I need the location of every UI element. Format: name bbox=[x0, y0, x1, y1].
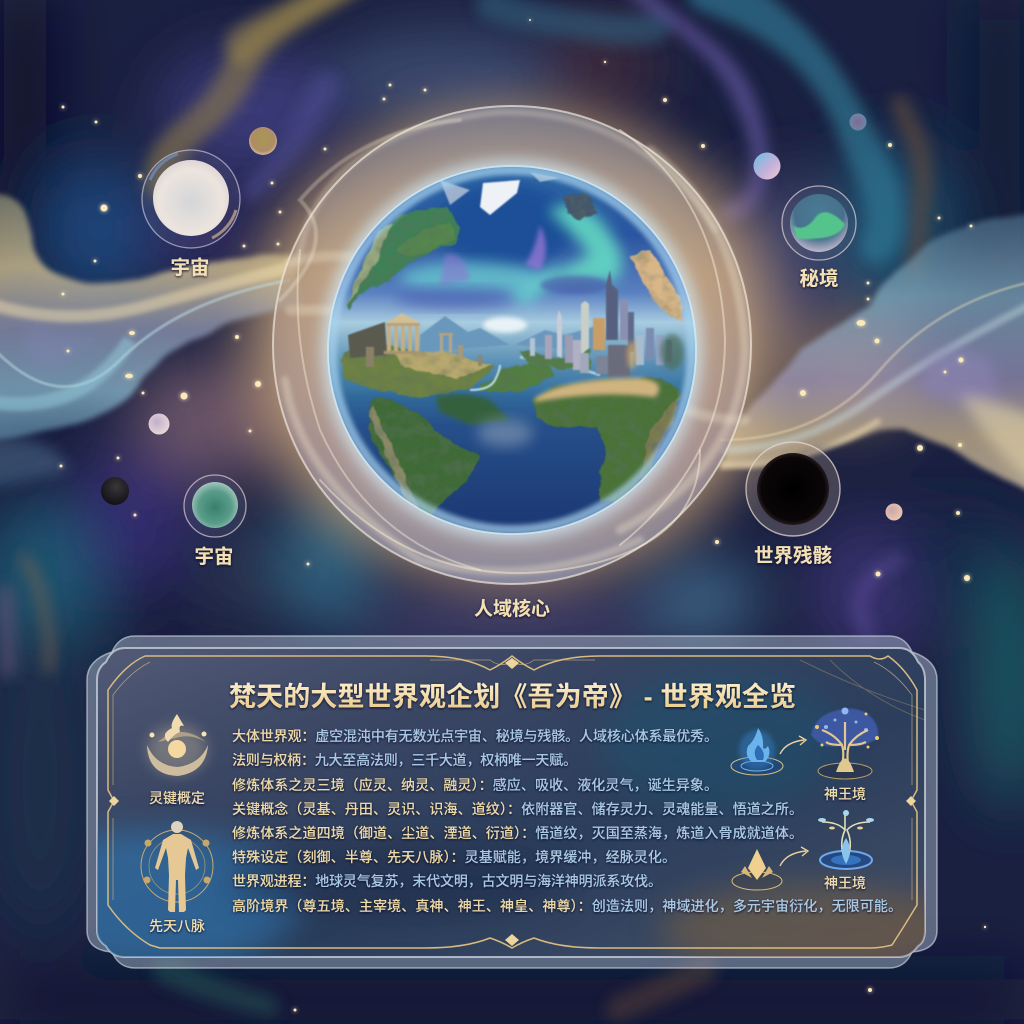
energy bubble around globe bbox=[273, 106, 751, 584]
planet: dark bbox=[101, 477, 129, 505]
cloud bbox=[477, 419, 533, 447]
planet: white universe bbox=[142, 150, 240, 248]
right energy wisp bbox=[720, 215, 1024, 490]
text block: worldview lines bbox=[232, 728, 902, 914]
label: universe upper: 宇宙 bbox=[170, 256, 210, 279]
planet: blue bubble bbox=[754, 152, 780, 180]
icon label: god king realm upper: 神王境 bbox=[824, 786, 866, 802]
planet: small tan bbox=[249, 127, 277, 155]
label: secret realm: 秘境 bbox=[799, 267, 839, 290]
north america bbox=[347, 207, 460, 310]
greenland bbox=[480, 180, 520, 215]
west terrain bbox=[340, 340, 495, 398]
temple ruins bbox=[348, 313, 482, 367]
icon label: innate meridians: 先天八脉 bbox=[149, 918, 205, 934]
futuristic city bbox=[530, 270, 684, 377]
africa bbox=[533, 378, 680, 503]
planet: mauve bubble bbox=[850, 114, 866, 130]
sky and aurora bbox=[328, 166, 696, 396]
line 2: 法则与权柄：九大至高法则，三千大道，权柄唯一天赋。 bbox=[232, 752, 577, 768]
icon: golden crystal to tree bbox=[732, 847, 808, 890]
icon: blue spirit sprout bbox=[818, 810, 874, 869]
label: human domain core: 人域核心 bbox=[474, 597, 550, 620]
icon: human meridian figure bbox=[141, 821, 213, 912]
line 7: 世界观进程：地球灵气复苏，末代文明，古文明与海洋神明派系攻伐。 bbox=[232, 873, 662, 889]
arctic ice bbox=[440, 172, 560, 205]
left energy wisp bbox=[0, 195, 300, 490]
planet: small lilac bbox=[148, 414, 170, 434]
arabia bbox=[630, 250, 683, 323]
icon: spirit swirl bbox=[147, 714, 208, 776]
icon label: spirit key: 灵键概定 bbox=[149, 790, 205, 806]
panel gold frame bbox=[108, 656, 917, 948]
line 5: 修炼体系之道四境（御道、尘道、湮道、衍道）：悟道纹，灭国至蒸海，炼道入骨成就道体。 bbox=[232, 825, 803, 841]
panel glass plate bbox=[97, 648, 925, 957]
panel: worldview overview bbox=[86, 635, 938, 969]
icon label: god king realm lower: 神王境 bbox=[824, 875, 866, 891]
south america bbox=[370, 397, 480, 517]
globe: Earth with ruins and city bbox=[320, 159, 704, 541]
mountains bbox=[420, 316, 600, 352]
planet: secret realm bbox=[782, 186, 856, 260]
line 6: 特殊设定（刻御、半尊、先天八脉）：灵基赋能，境界缓冲，经脉灵化。 bbox=[232, 849, 676, 865]
planet: pink small bbox=[886, 504, 902, 520]
icon: golden tree bbox=[811, 708, 879, 779]
line 3: 修炼体系之灵三境（应灵、纳灵、融灵）：感应、吸收、液化灵气，诞生异象。 bbox=[232, 777, 718, 793]
europe bbox=[563, 193, 597, 220]
icon: blue flame to tree bbox=[731, 728, 806, 775]
label: world remains: 世界残骸 bbox=[754, 545, 832, 567]
line 1: 大体世界观：虚空混沌中有无数光点宇宙、秘境与残骸。人域核心体系最优秀。 bbox=[232, 728, 718, 744]
ocean bbox=[329, 348, 695, 534]
frame ornaments bbox=[109, 658, 916, 946]
center terrain bbox=[480, 362, 555, 392]
line 8: 高阶境界（尊五境、主宰境、真神、神王、神皇、神尊）：创造法则，神域进化，多元宇宙衍化，无限可能。 bbox=[232, 898, 902, 914]
rim light bbox=[332, 170, 692, 530]
panel tones bbox=[97, 656, 925, 957]
planet: green universe bbox=[184, 475, 246, 537]
label: universe lower: 宇宙 bbox=[194, 545, 234, 568]
line 4: 关键概念（灵基、丹田、灵识、识海、道纹）：依附器官、储存灵力、灵魂能量、悟道之所。 bbox=[232, 801, 803, 817]
title: 梵天的大型世界观企划《吾为帝》 - 世界观全览 bbox=[229, 682, 796, 712]
planet: world remains bbox=[746, 442, 840, 536]
panel back layers bbox=[87, 636, 937, 968]
